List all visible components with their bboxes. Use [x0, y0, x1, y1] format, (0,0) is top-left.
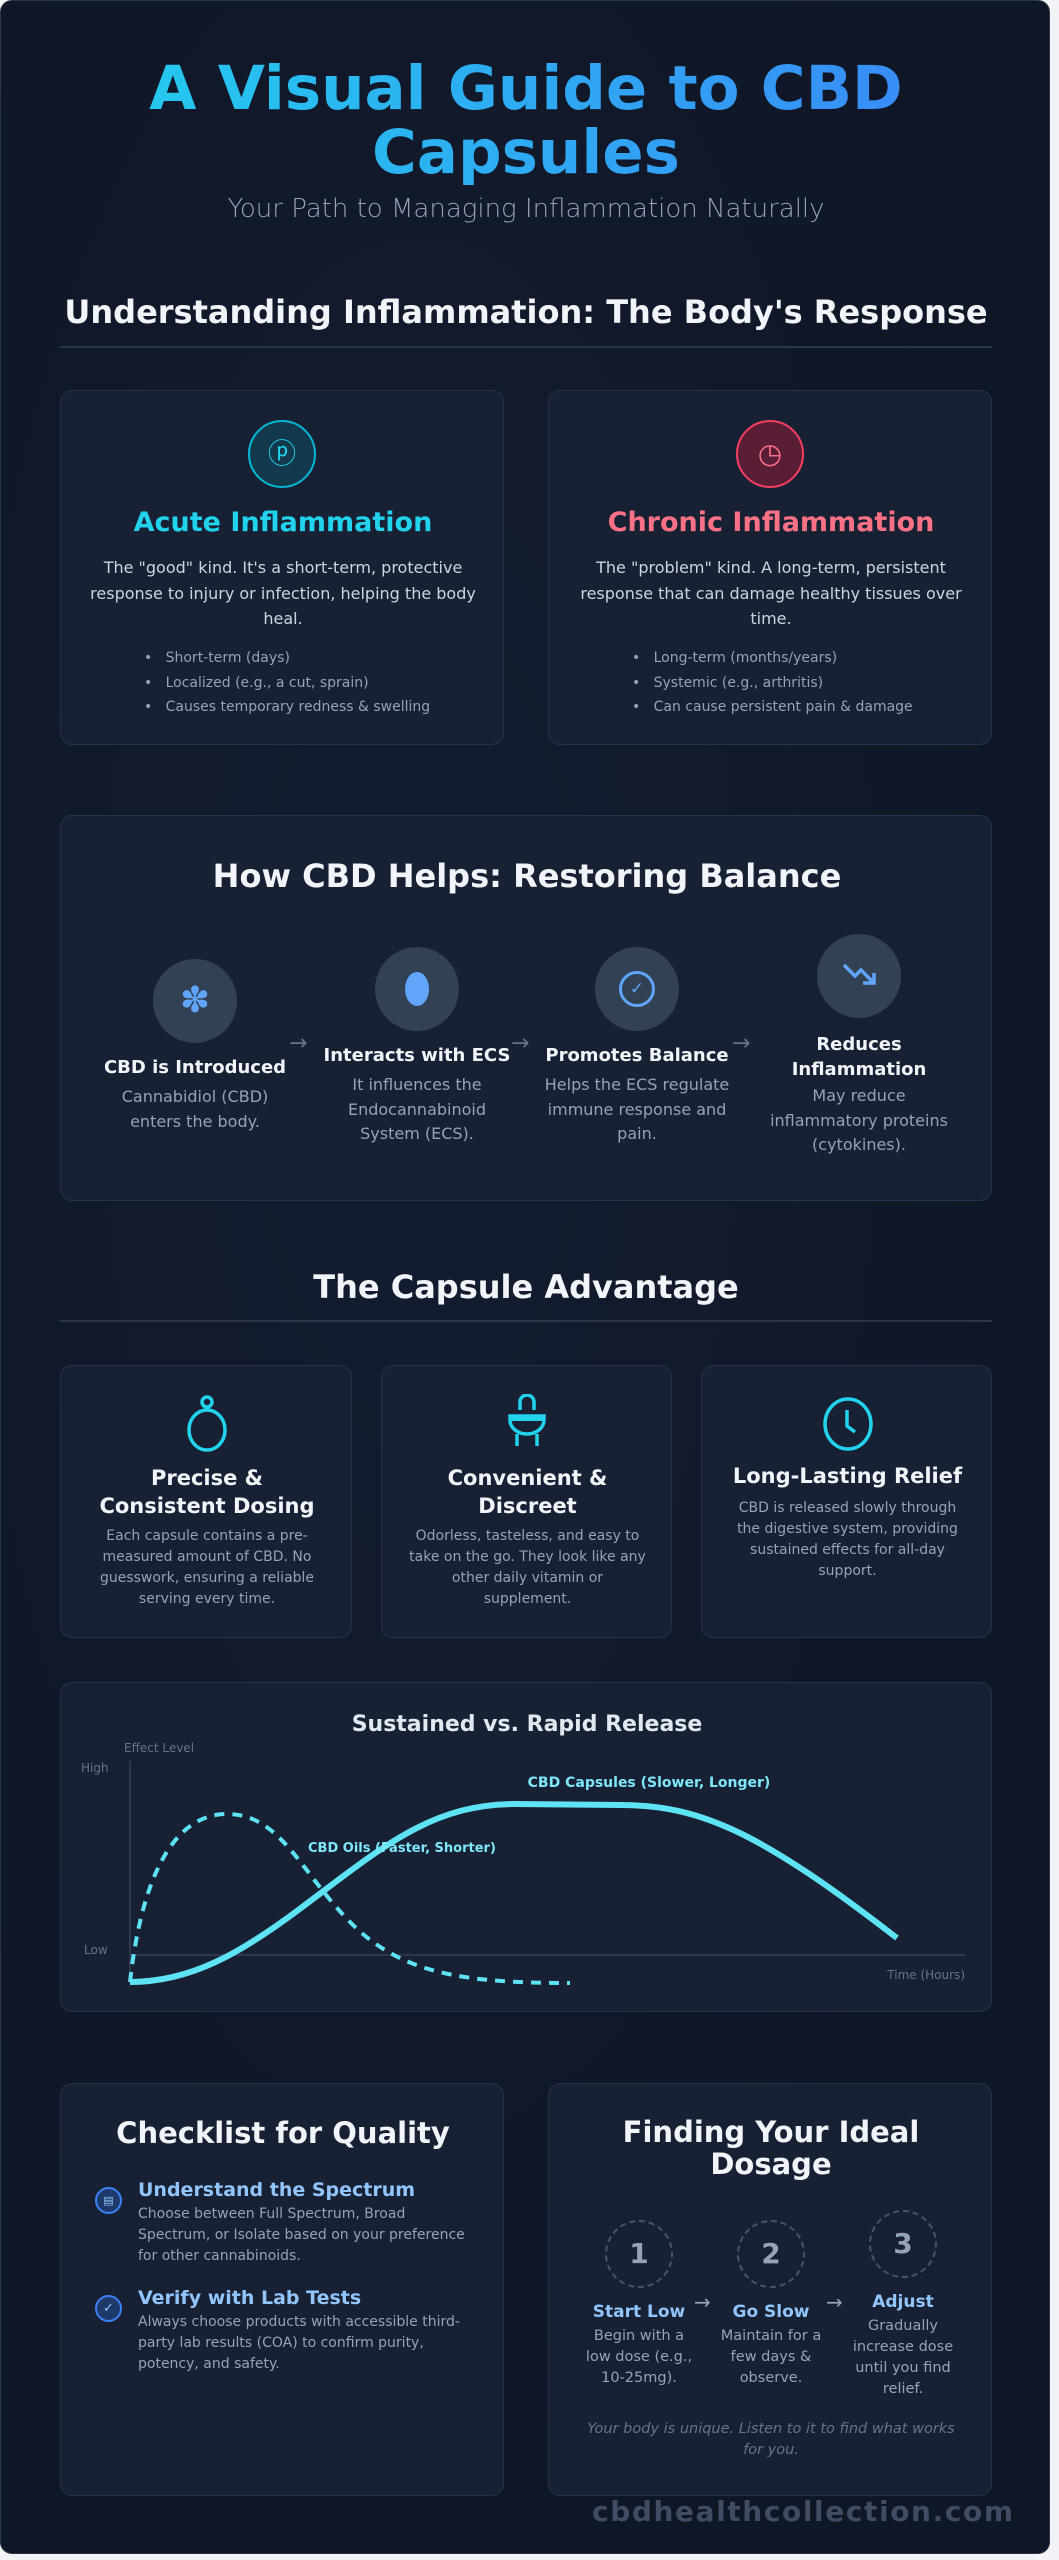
step 1: Begin with a [594, 2328, 684, 2344]
card: long-lasting: Long-Lasting Relief [733, 1464, 962, 1488]
step 3: pain. [617, 1124, 657, 1143]
chronic bullets [632, 650, 913, 715]
step 1: Cannabidiol (CBD) [122, 1087, 268, 1106]
step 1 [104, 959, 286, 1130]
acute bullets: • Short-term (days) [144, 650, 290, 666]
line chart: Time (Hours) [886, 1968, 965, 1982]
card: precise dosing: Precise & [151, 1466, 263, 1490]
arrow: → [289, 1031, 307, 1056]
step 1: CBD is Introduced [104, 1057, 286, 1078]
heading: understanding inflammation: Understanding Inflammation: The Body's Response [64, 293, 988, 331]
card: convenient: Odorless, tasteless, and easy to take on the go. They look like any other daily vitamin or supplement. [409, 1528, 646, 1607]
step 4: (cytokines). [812, 1135, 906, 1154]
step 2: Endocannabinoid [348, 1100, 486, 1118]
step 2: 2 [761, 2237, 781, 2270]
heading: capsule advantage: The Capsule Advantage [313, 1268, 739, 1306]
step 3: Promotes Balance [545, 1045, 729, 1066]
acute description: The "good" kind. It's a short-term, protective response to injury or infection, helping the body heal. [90, 558, 476, 628]
icon: drop [375, 947, 459, 1031]
step 2 [721, 2220, 821, 2386]
dosage title: Dosage [710, 2147, 832, 2181]
panel: chronic inflammation [548, 390, 992, 745]
item: spectrum [95, 2179, 465, 2264]
title: Capsules [372, 117, 680, 188]
dosage title [623, 2115, 919, 2181]
step 4: Reduces [816, 1034, 902, 1055]
chronic title: Chronic Inflammation [608, 507, 934, 538]
panel: how CBD helps [60, 815, 992, 1201]
card: precise dosing: Consistent Dosing [99, 1494, 315, 1518]
card: long-lasting: CBD is released slowly through the digestive system, providing sustained effects for all-day support. [737, 1500, 958, 1579]
arrow: → [694, 2290, 711, 2314]
step 3: relief. [883, 2381, 923, 2397]
arrow: → [732, 1031, 750, 1056]
item: spectrum: Choose between Full Spectrum, Broad Spectrum, or Isolate based on your preference for other cannabinoids. [138, 2206, 465, 2264]
note: Your body is unique. Listen to it to find what works for you. [587, 2421, 955, 2458]
chronic description: The "problem" kind. A long-term, persistent response that can damage healthy tissues over time. [580, 558, 962, 628]
line chart: CBD Oils (Faster, Shorter) [308, 1841, 496, 1856]
icon: trend down [817, 934, 901, 1018]
step 3: Helps the ECS regulate [545, 1075, 729, 1094]
card: precise dosing [60, 1365, 352, 1638]
step 2 [324, 947, 510, 1143]
acute title: Acute Inflammation [134, 507, 432, 538]
icon: clock: ◷ [758, 437, 782, 470]
step 2: Go Slow [732, 2302, 810, 2322]
card: convenient [381, 1365, 672, 1638]
checklist title: Checklist for Quality [116, 2116, 450, 2150]
arrow: → [511, 1031, 529, 1056]
card: convenient: Convenient & [448, 1466, 607, 1490]
step 3: Gradually [868, 2318, 938, 2334]
item: lab tests: Verify with Lab Tests [138, 2287, 361, 2309]
chronic bullets: • Can cause persistent pain & damage [632, 699, 913, 715]
panel: release chart [60, 1682, 992, 2012]
step 2: observe. [740, 2370, 802, 2386]
icon: check [595, 947, 679, 1031]
chronic bullets: • Long-term (months/years) [632, 650, 837, 666]
step 1: 1 [629, 2237, 649, 2270]
item: spectrum: Understand the Spectrum [138, 2179, 415, 2201]
acute bullets: • Localized (e.g., a cut, sprain) [144, 674, 369, 690]
icon: clock [736, 420, 804, 488]
panel: acute inflammation [60, 390, 504, 745]
step 1: enters the body. [130, 1112, 260, 1130]
icon: acute [248, 420, 316, 488]
card: convenient: Discreet [478, 1494, 577, 1518]
card: long-lasting [701, 1365, 992, 1638]
icon: pill bottle [508, 1394, 546, 1446]
step 1: 10-25mg). [601, 2370, 677, 2386]
step 2: Interacts with ECS [324, 1045, 510, 1066]
step 1: Start Low [593, 2302, 685, 2322]
heading: How CBD Helps: Restoring Balance [213, 857, 841, 895]
card: precise dosing: Each capsule contains a pre-measured amount of CBD. No guesswork, ensuring a reliable serving every time. [100, 1528, 314, 1607]
panel: dosage [548, 2083, 992, 2496]
step 3: 3 [893, 2227, 913, 2260]
line chart: CBD Capsules (Slower, Longer) [528, 1775, 770, 1791]
chart title: Sustained vs. Rapid Release [352, 1712, 702, 1737]
acute bullets: • Causes temporary redness & swelling [144, 699, 430, 715]
step 3 [853, 2210, 953, 2397]
step 3: increase dose [853, 2339, 953, 2355]
title [1, 57, 1051, 185]
step 4 [770, 934, 948, 1154]
line chart: Effect Level [124, 1741, 194, 1755]
icon: puzzle [153, 959, 237, 1043]
title: A Visual Guide to CBD [149, 53, 903, 124]
step 2: Maintain for a [721, 2328, 821, 2344]
line chart [81, 1741, 965, 1985]
step 3: Adjust [872, 2292, 934, 2312]
step 2: System (ECS). [360, 1124, 474, 1143]
acute bullets [144, 650, 430, 715]
step 4: May reduce [812, 1086, 906, 1105]
item: lab tests [95, 2287, 460, 2372]
line chart: Low [84, 1943, 108, 1957]
step 3: immune response and [548, 1100, 726, 1118]
step 3 [545, 947, 729, 1143]
dosage title: Finding Your Ideal [623, 2115, 919, 2149]
icon: puzzle: ✽ [180, 980, 210, 1021]
item: lab tests: ✓ [103, 2301, 114, 2316]
panel: checklist [60, 2083, 504, 2496]
step 4: inflammatory proteins [770, 1110, 948, 1130]
item: lab tests: Always choose products with accessible third-party lab results (COA) to confirm purity, potency, and safety. [138, 2314, 460, 2372]
step 1 [586, 2220, 692, 2386]
subtitle: Your Path to Managing Inflammation Naturally [227, 194, 825, 224]
line chart: High [81, 1761, 109, 1775]
step 4: Inflammation [792, 1059, 926, 1080]
chronic bullets: • Systemic (e.g., arthritis) [632, 674, 823, 690]
icon: acute: ⓟ [268, 437, 296, 470]
step 3: until you find [855, 2360, 951, 2376]
step 2: few days & [731, 2349, 811, 2365]
step 2: It influences the [352, 1075, 482, 1094]
footer: website: cbdhealthcollection.com [592, 2495, 1015, 2528]
icon: clock [823, 1397, 873, 1451]
icon: capsule ring [187, 1395, 227, 1452]
item: spectrum: ▤ [103, 2194, 114, 2207]
arrow: → [826, 2290, 843, 2314]
icon: check: ✓ [630, 979, 644, 999]
step 1: low dose (e.g., [586, 2349, 692, 2365]
